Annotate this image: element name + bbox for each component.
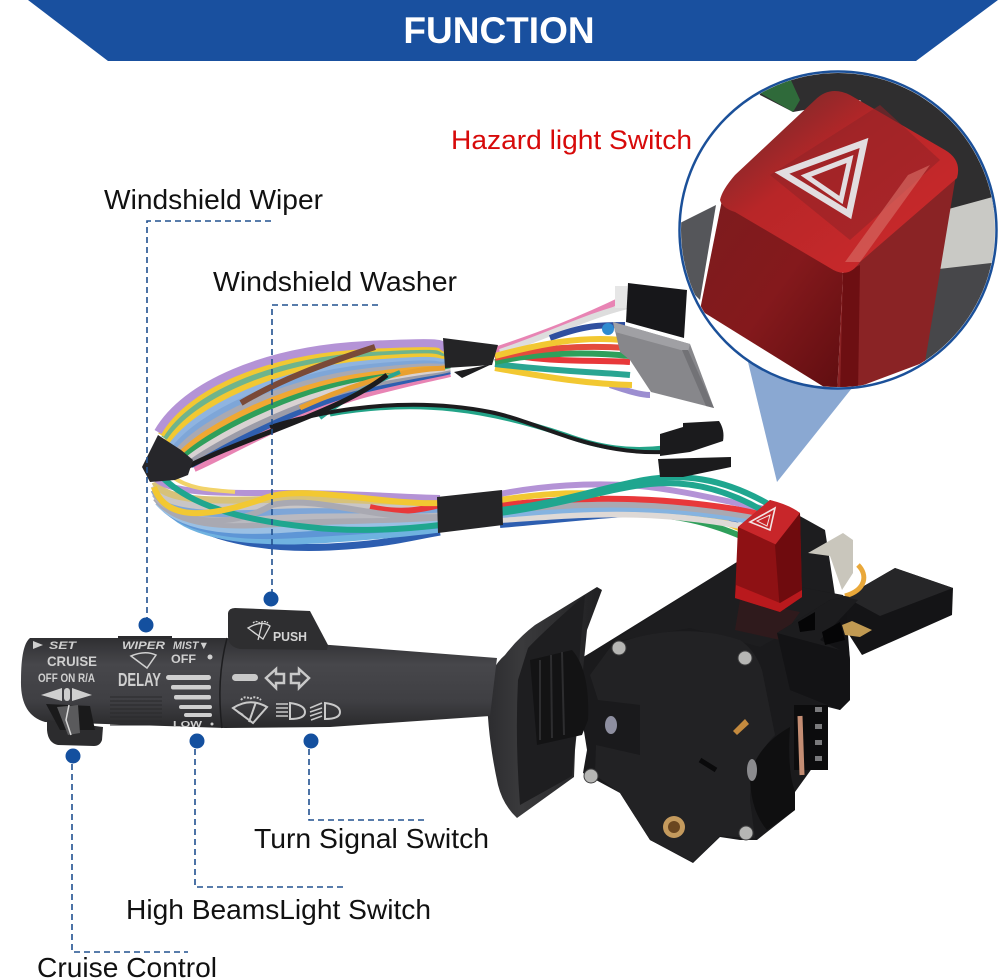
brass insert bbox=[842, 621, 872, 637]
wiper band top bbox=[118, 636, 172, 639]
grey bushing bbox=[605, 716, 617, 734]
housing front plate bbox=[590, 631, 775, 862]
wiper markings bbox=[118, 640, 214, 729]
red cap side faces bbox=[700, 175, 956, 395]
cruise markings: CRUISE bbox=[47, 653, 97, 669]
slot bbox=[700, 760, 716, 770]
contacts block bbox=[794, 705, 828, 775]
callout: Windshield Washer: Windshield Washer bbox=[213, 266, 457, 297]
connector: small white plug bbox=[615, 286, 627, 308]
cruise knob bbox=[46, 704, 103, 746]
label: Hazard light Switch: Hazard light Switch bbox=[451, 125, 692, 155]
lower wire bundle bbox=[154, 477, 440, 548]
lens background bbox=[681, 73, 995, 362]
cruise markings bbox=[33, 640, 97, 701]
callout: Turn Signal Switch: Turn Signal Switch bbox=[254, 823, 489, 854]
rubber boot ribs bbox=[530, 650, 588, 745]
latch top bbox=[777, 597, 858, 650]
wiring harness bbox=[154, 298, 770, 548]
white connector bbox=[808, 533, 853, 590]
hazard triangle icon bbox=[782, 143, 864, 214]
control stalk lever bbox=[21, 608, 497, 746]
title banner: FUNCTION bbox=[403, 10, 595, 51]
wiper markings: LOW bbox=[173, 719, 203, 729]
cruise markings: SET bbox=[49, 640, 78, 652]
callout: High BeamsLight Switch bbox=[126, 734, 431, 925]
cruise markings: OFF ON R/A bbox=[38, 671, 95, 685]
red cap top face bbox=[720, 91, 958, 273]
upper right wires bbox=[495, 298, 650, 395]
connector: grey plug bbox=[613, 322, 714, 408]
front-right latch bbox=[777, 597, 850, 710]
red hazard button bbox=[735, 500, 802, 612]
connector: blue pin bbox=[602, 323, 614, 335]
callout: Turn Signal Switch bbox=[254, 734, 489, 854]
lower right wires bbox=[500, 477, 770, 545]
ring seam bbox=[220, 638, 227, 728]
callout: Windshield Wiper: Windshield Wiper bbox=[104, 184, 323, 215]
small wires bbox=[845, 565, 864, 596]
harness connectors bbox=[602, 283, 731, 477]
gasket bezel bbox=[487, 587, 602, 818]
wiper markings: MIST▼ bbox=[173, 640, 209, 652]
main housing bbox=[573, 562, 850, 863]
zoom pointer triangle bbox=[748, 362, 852, 482]
rear black parts bbox=[798, 515, 835, 595]
black mounting bar bbox=[845, 568, 953, 655]
title banner bbox=[28, 0, 998, 61]
latch slots bbox=[798, 612, 845, 645]
reflection bbox=[735, 600, 800, 640]
upper wire bundle bbox=[158, 343, 664, 468]
housing top face bbox=[612, 562, 850, 647]
callout: Windshield Washer bbox=[213, 266, 457, 606]
brass pin bbox=[733, 719, 749, 735]
callout: Cruise Control bbox=[37, 748, 217, 980]
black cam bbox=[750, 727, 795, 830]
connector: black block bbox=[626, 283, 687, 338]
callout: High BeamsLight Switch: High BeamsLight Switch bbox=[126, 894, 431, 925]
knurled band bbox=[110, 697, 162, 725]
wiper markings: DELAY bbox=[118, 670, 161, 690]
indicator symbols bbox=[232, 669, 340, 723]
tape wraps bbox=[142, 338, 503, 533]
magnified hazard switch bbox=[680, 60, 1000, 395]
brass hole bbox=[663, 816, 685, 838]
screws bbox=[584, 641, 753, 840]
stalk body bbox=[21, 638, 497, 728]
connector: small black pair bbox=[658, 421, 731, 477]
washer push button: PUSH bbox=[273, 629, 307, 644]
washer push button bbox=[228, 608, 328, 650]
switch body bbox=[573, 515, 953, 863]
callout: Windshield Wiper bbox=[104, 184, 323, 632]
wiper markings: WIPER bbox=[122, 640, 165, 652]
wiper markings: OFF bbox=[171, 654, 196, 666]
